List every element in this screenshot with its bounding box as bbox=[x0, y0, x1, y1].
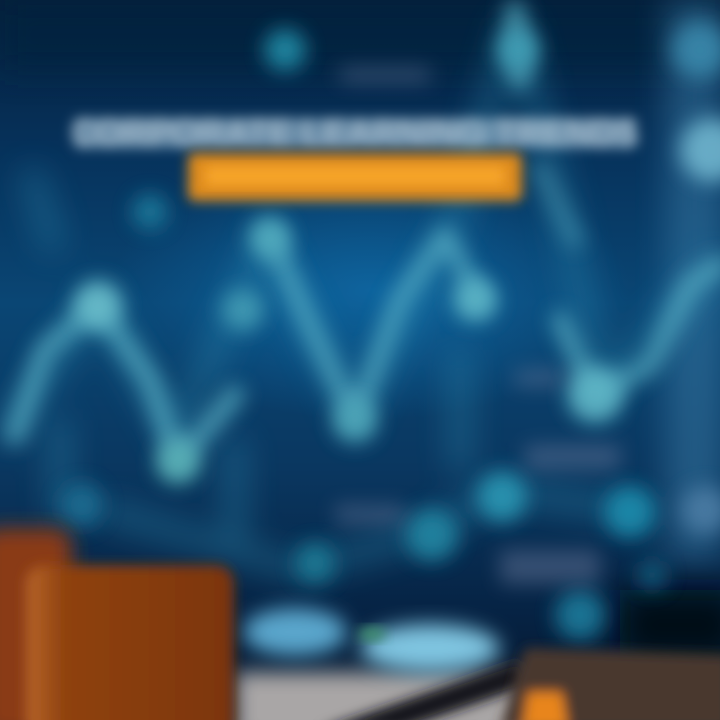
title: CORPORATE LEARNING TRENDS bbox=[70, 111, 640, 155]
main line chart bbox=[15, 10, 720, 462]
desk surface bbox=[235, 608, 530, 720]
secondary chart lines bbox=[0, 20, 720, 570]
orange banner bbox=[188, 153, 522, 201]
orange mugs bbox=[0, 528, 234, 720]
faint data labels bbox=[335, 68, 620, 584]
chart data nodes bbox=[60, 22, 720, 640]
wooden tray bbox=[500, 648, 720, 720]
